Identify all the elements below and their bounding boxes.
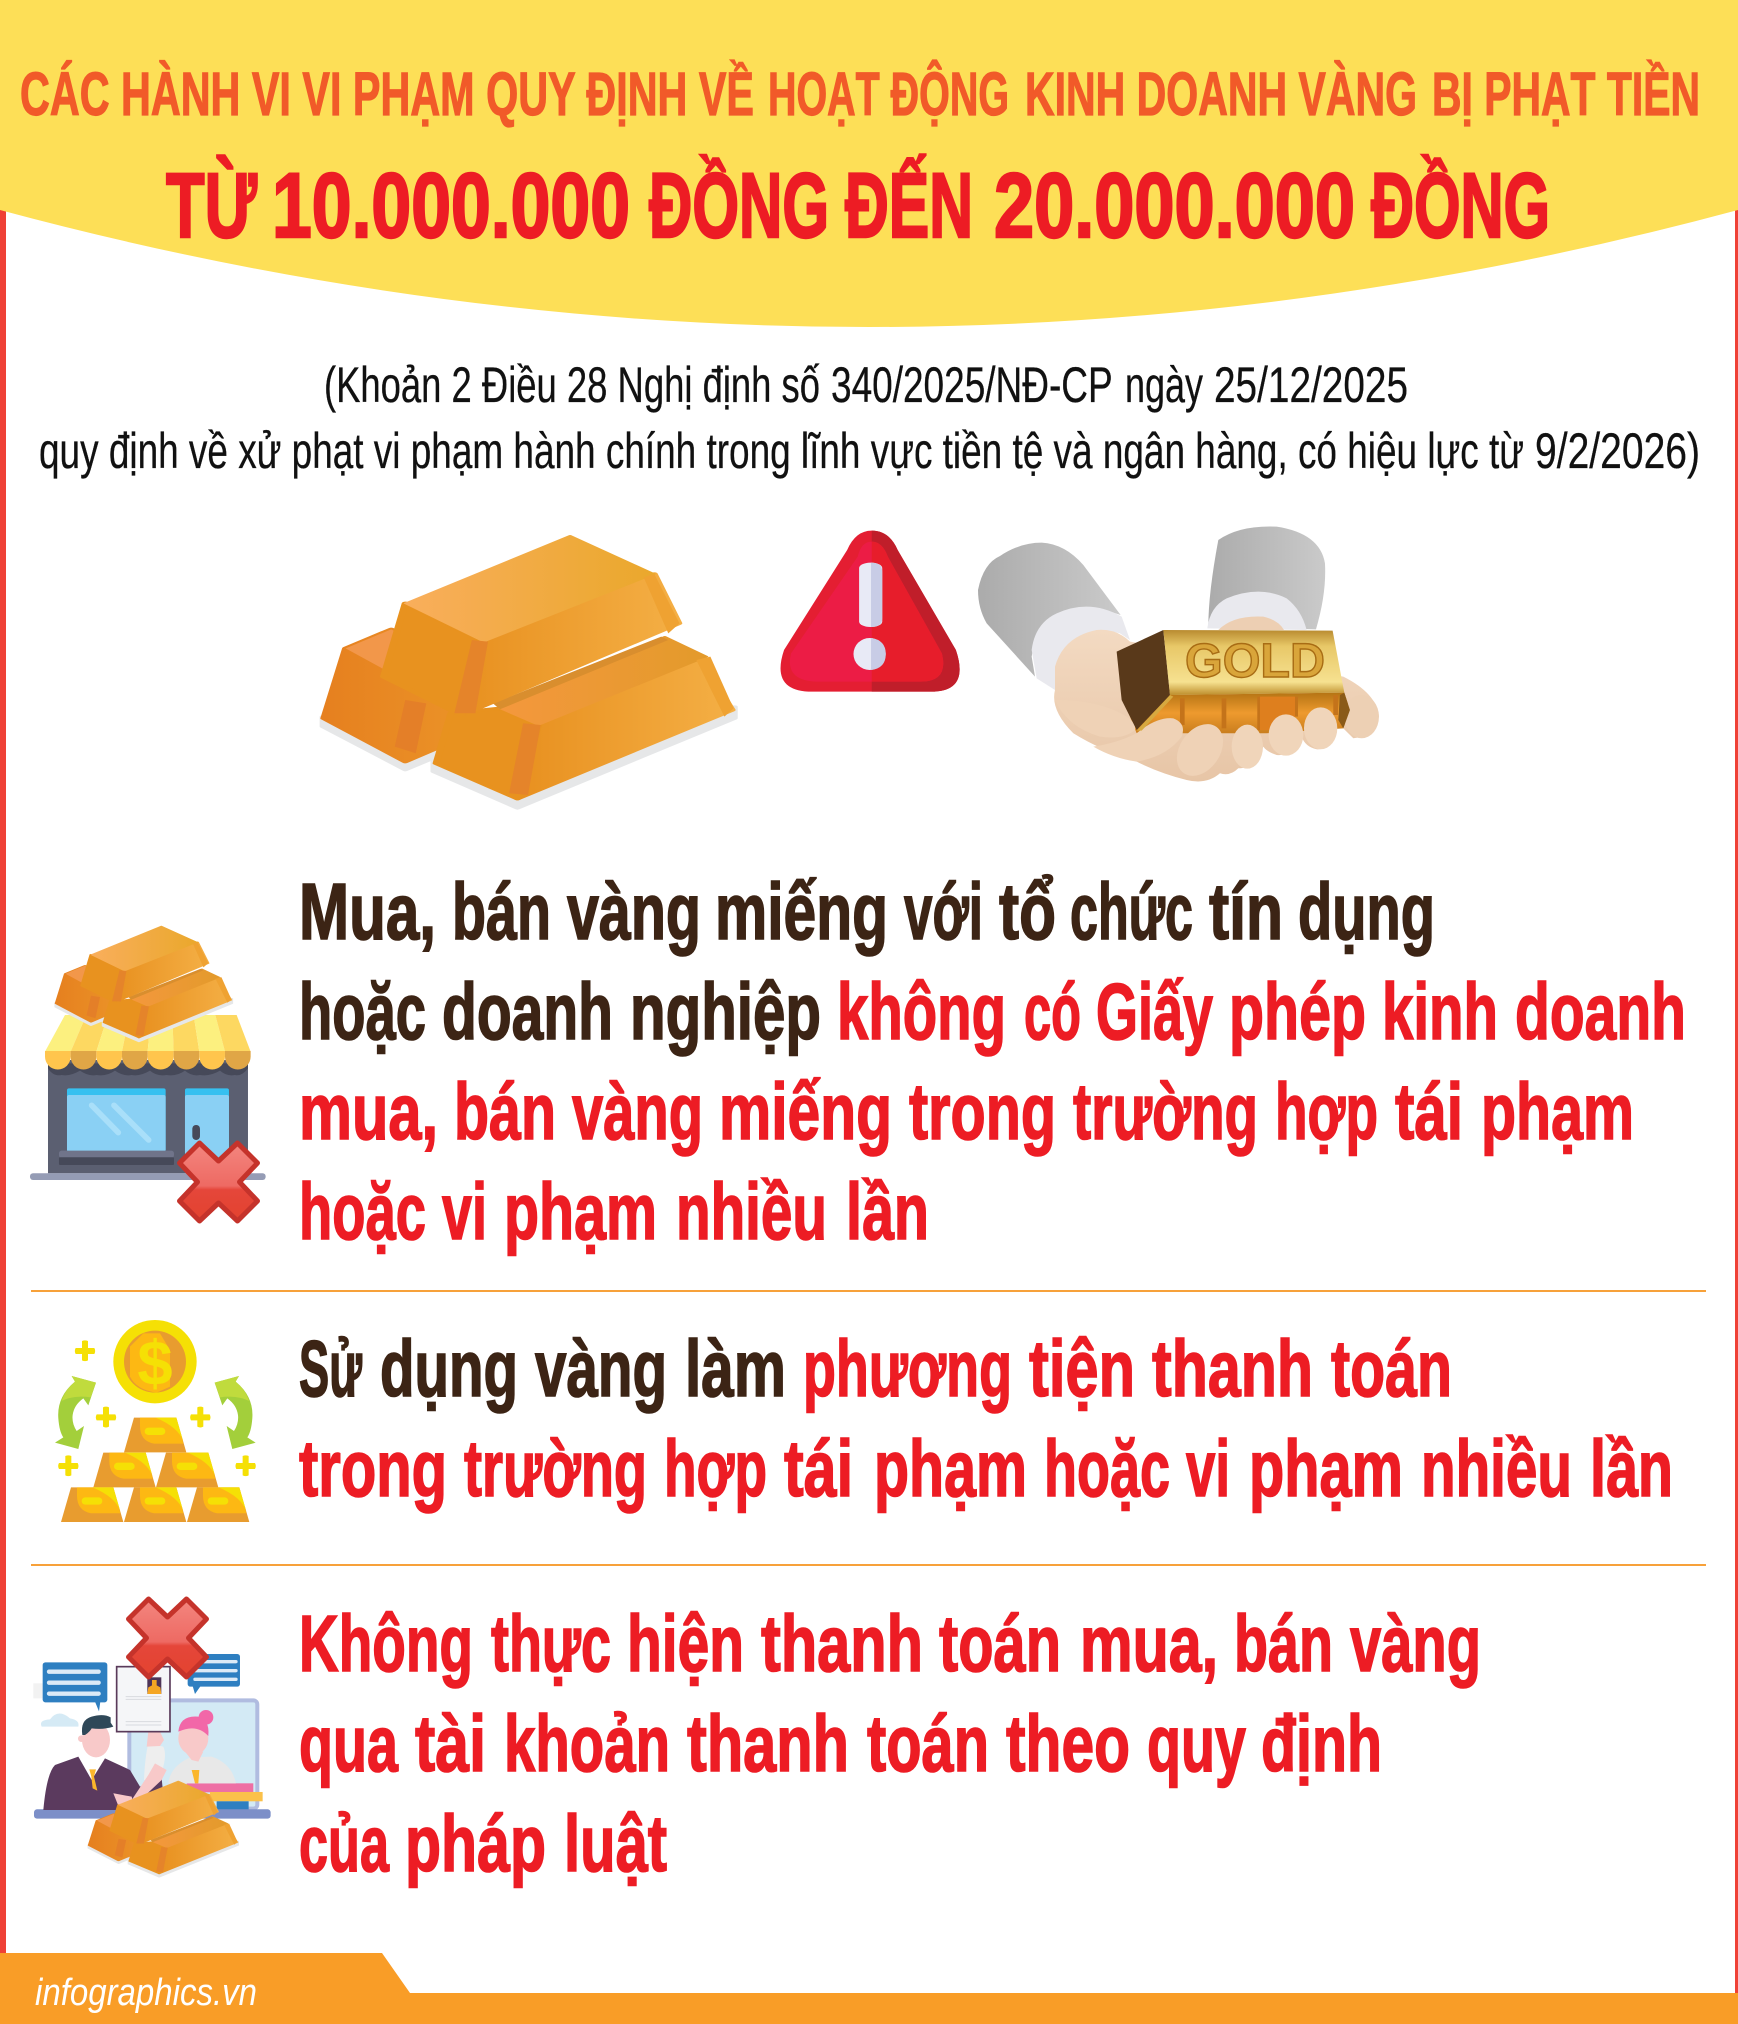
title line 2: ĐỒNG (1371, 154, 1550, 257)
row 3 text: bán (1234, 1599, 1333, 1688)
title line 2: ĐẾN (845, 154, 973, 257)
row 1 text: kinh (1382, 967, 1498, 1056)
header banner (0, 0, 1738, 327)
row 3 text (299, 1599, 1481, 1888)
row 1 text: lần (846, 1167, 929, 1256)
row 1 text: tín (1209, 867, 1283, 956)
row 1 text: vi (442, 1167, 487, 1256)
row 1 text: doanh (442, 967, 613, 1056)
icon: closed gold shop (30, 926, 266, 1221)
row 1 text: vàng (572, 1067, 703, 1156)
row 1 text: trong (909, 1067, 1056, 1156)
row 1 text: có (1024, 967, 1081, 1056)
legal reference text: 25/12/2025 (1214, 357, 1408, 413)
title line 2: ĐỒNG (649, 154, 829, 257)
row 1 text: Mua, (299, 867, 436, 956)
row 2 text: Sử (299, 1324, 362, 1413)
row 1 text: hoặc (299, 967, 426, 1056)
row 2 text: toán (1331, 1324, 1452, 1413)
row 1 text: hợp (1275, 1067, 1378, 1156)
row 1 text: trường (1073, 1067, 1258, 1156)
row 1 text: với (904, 867, 983, 956)
row 2 text: vàng (535, 1324, 667, 1413)
row 1 text: nhiều (676, 1167, 827, 1256)
row 1 text: phạm (1481, 1067, 1634, 1156)
row 2 text: hợp (664, 1424, 767, 1513)
row 1 text: mua, (299, 1067, 438, 1156)
row 2 text: trường (464, 1424, 647, 1513)
row 1 text: tái (1395, 1067, 1463, 1156)
legal reference text (39, 357, 1700, 479)
row 3 text: toán (939, 1599, 1061, 1688)
footer brand: infographics.vn (35, 1972, 257, 2014)
row 1 text: chức (1070, 867, 1193, 956)
row 3 text: mua, (1080, 1599, 1218, 1688)
page border: left (0, 200, 6, 1960)
row 2 text: phạm (1249, 1424, 1403, 1513)
row 3 text: thanh (687, 1699, 849, 1788)
row 3 text: định (1261, 1699, 1382, 1788)
row 2 text: vi (1186, 1424, 1230, 1513)
title line 2: 10.000.000 (272, 155, 630, 257)
row 3 text: theo (1006, 1699, 1130, 1788)
row 3 text: quy (1147, 1699, 1246, 1788)
icon: warning triangle (781, 531, 960, 692)
title line 2: 20.000.000 (994, 155, 1355, 257)
icon: hands holding gold bar: GOLD (1185, 635, 1325, 688)
row 3 text: vàng (1350, 1599, 1481, 1688)
row 2 text: làm (685, 1324, 786, 1413)
icon: coin and gold bars exchange: $ (137, 1329, 173, 1399)
row 2 text: nhiều (1421, 1424, 1572, 1513)
title line 2: TỪ (166, 154, 257, 257)
footer bar (0, 1953, 1738, 2024)
row 1 text: bán (454, 1067, 556, 1156)
legal reference text: (Khoản 2 Điều 28 Nghị định số (324, 357, 820, 413)
row 1 text (299, 867, 1686, 1256)
row 2 text: lần (1590, 1424, 1673, 1513)
row 3 text: toán (867, 1699, 989, 1788)
title line 1: KINH DOANH VÀNG (1025, 60, 1417, 128)
row 1 text: phạm (504, 1167, 657, 1256)
row 1 text: miếng (719, 1067, 892, 1156)
row 3 text: pháp (405, 1799, 546, 1888)
row 3 text: qua (299, 1699, 398, 1788)
legal reference text: ngày (1125, 357, 1203, 413)
icon: hands holding gold bar (978, 526, 1379, 785)
row 2 text: hoặc (1044, 1424, 1170, 1513)
page border: right (1735, 200, 1738, 2000)
row 2 text: thanh (1152, 1324, 1313, 1413)
row 2 text: phương (803, 1324, 1012, 1413)
row 3 text: khoản (504, 1699, 670, 1788)
row 1 text: vàng (567, 867, 701, 956)
row 2 text: trong (299, 1424, 447, 1513)
row 1 text: nghiệp (630, 967, 821, 1056)
row 3 text: của (299, 1799, 389, 1888)
row 1 text: hoặc (299, 1167, 426, 1256)
title line 1: HOẠT ĐỘNG (768, 60, 1009, 128)
row 3 text: luật (564, 1799, 667, 1888)
row 1 text: không (837, 967, 1006, 1056)
legal reference text: 340/2025/NĐ-CP (831, 357, 1112, 413)
row 1 text: miếng (715, 867, 888, 956)
row 2 text: tiện (1029, 1324, 1135, 1413)
row 2 text: tái (784, 1424, 853, 1513)
row 3 text: thanh (761, 1599, 923, 1688)
row 3 text: hiện (627, 1599, 744, 1688)
row 3 text: Không (299, 1599, 473, 1688)
row 1 text: Giấy (1096, 967, 1213, 1056)
row 1 text: bán (452, 867, 551, 956)
icon: coin and gold bars exchange (55, 1320, 256, 1522)
row 1 text: dụng (1298, 867, 1435, 956)
title line 1: CÁC HÀNH VI VI PHẠM QUY ĐỊNH VỀ (20, 60, 754, 128)
row 2 text: phạm (874, 1424, 1027, 1513)
row 1 text: tổ (999, 867, 1056, 956)
row 3 text: thực (491, 1599, 611, 1688)
row 1 text: phép (1229, 967, 1366, 1056)
row 3 text: tài (415, 1699, 486, 1788)
icon: business meeting with gold and cross (33, 1599, 271, 1877)
row 2 text: dụng (380, 1324, 518, 1413)
icon: gold bars pile (322, 536, 735, 808)
row 2 text (299, 1324, 1673, 1513)
